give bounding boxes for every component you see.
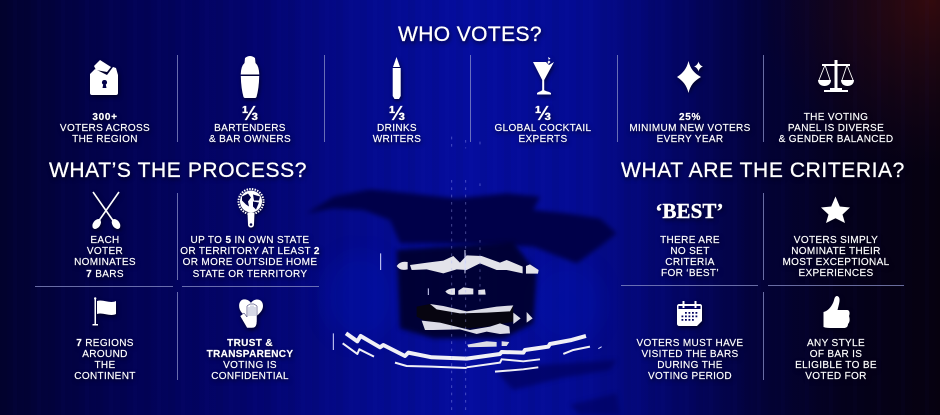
text: up to 5 in own state: OR TERRITORY AT LEAST 2 (180, 246, 320, 257)
text: any style of bar: OF BAR IS (810, 349, 862, 360)
text: voters across the region: 300+ (92, 112, 118, 123)
text: voters simply nominate: VOTERS SIMPLY (794, 235, 878, 246)
text: any style of bar: VOTED FOR (805, 371, 867, 382)
icon: calendar (677, 301, 702, 326)
text: minimum new voters: 25% (679, 112, 701, 123)
artwork: chin wave lines (346, 333, 586, 359)
text: up to 5 in own state: STATE OR TERRITORY (193, 269, 307, 280)
title: who votes: WHO VOTES? (398, 23, 542, 46)
text: trust and transparency: CONFIDENTIAL (211, 371, 289, 382)
text: no set criteria: CRITERIA (665, 257, 715, 268)
icon: scales of justice (818, 60, 854, 92)
text: must have visited: VOTERS MUST HAVE (637, 338, 743, 349)
text: bartenders and bar owners: & BAR OWNERS (209, 134, 291, 145)
icon: sparkle (677, 61, 703, 93)
text: any style of bar: ELIGIBLE TO BE (795, 360, 877, 371)
text: each voter nominates: NOMINATES (74, 257, 136, 268)
icon: martini glass (533, 57, 554, 94)
icon: cocktail shaker (241, 56, 259, 98)
icon: heart and hand (239, 299, 263, 328)
text: no set criteria: NO SET (670, 246, 710, 257)
text: voters across the region (60, 112, 150, 145)
dividers: process (35, 193, 319, 380)
text: bartenders and bar owners (209, 103, 291, 145)
text: bartenders and bar owners: ⅓ (242, 103, 258, 125)
text: minimum new voters: MINIMUM NEW VOTERS (629, 123, 751, 134)
icon: flag (92, 297, 116, 326)
text: voting panel diverse (779, 112, 893, 145)
text: up to 5 in own state (180, 235, 320, 280)
text: up to 5 in own state: OR MORE OUTSIDE HOME (183, 257, 317, 268)
text: each voter nominates: 7 BARS (86, 269, 124, 280)
icon: crossed bar spoons (91, 192, 122, 231)
icon: ballot box lock (90, 60, 118, 95)
text: voters simply nominate (782, 235, 890, 279)
text: up to 5 in own state: UP TO 5 IN OWN STATE (191, 235, 309, 246)
text: global cocktail experts: ⅓ (535, 103, 551, 125)
icon: best wordmark: ‘BEST’ (655, 199, 724, 223)
text: drinks writers: DRINKS (377, 123, 417, 134)
text: no set criteria: FOR ‘BEST’ (661, 268, 719, 279)
text: each voter nominates: EACH (90, 235, 120, 246)
text: drinks writers: WRITERS (373, 134, 421, 145)
text: must have visited: DURING THE (657, 360, 723, 371)
text: trust and transparency (207, 338, 293, 382)
dividers: criteria (621, 193, 904, 380)
text: voters simply nominate: NOMINATE THEIR (791, 246, 881, 257)
text: voters simply nominate: MOST EXCEPTIONAL (782, 257, 890, 268)
icon: star (821, 196, 850, 223)
text: must have visited: VOTING PERIOD (648, 371, 732, 382)
text: minimum new voters: EVERY YEAR (657, 134, 723, 145)
text: any style of bar (795, 338, 877, 382)
text: voters across the region: THE REGION (72, 134, 138, 145)
dividers: who votes (178, 55, 764, 142)
text: trust and transparency: TRUST & (227, 338, 273, 349)
text: any style of bar: ANY STYLE (807, 338, 865, 349)
heading: what are the criteria: WHAT ARE THE CRITERIA? (621, 159, 905, 182)
text: 7 regions: THE (94, 360, 116, 371)
text: bartenders and bar owners: BARTENDERS (214, 123, 286, 134)
text: trust and transparency: TRANSPARENCY (207, 349, 293, 360)
icon: globe strainer (238, 189, 264, 228)
icon: pencil (393, 57, 401, 99)
text: voting panel diverse: & GENDER BALANCED (779, 134, 893, 145)
heading: what's the process: WHAT’S THE PROCESS? (49, 159, 307, 182)
text: voting panel diverse: PANEL IS DIVERSE (788, 123, 884, 134)
artwork: dark mouth (417, 304, 513, 328)
abstract distorted face artwork (307, 137, 620, 415)
text: drinks writers: ⅓ (389, 103, 405, 125)
text: no set criteria (660, 235, 720, 279)
text: 7 regions (74, 338, 136, 382)
text: 7 regions: CONTINENT (74, 371, 136, 382)
text: 7 regions: 7 REGIONS (76, 338, 134, 349)
text: voters simply nominate: EXPERIENCES (799, 268, 873, 279)
icon: thumbs up (824, 296, 850, 328)
artwork: lower lip highlights (422, 304, 533, 347)
text: must have visited (637, 338, 743, 382)
text: 7 regions: AROUND (82, 349, 128, 360)
artwork: teeth dots (445, 287, 486, 295)
text: minimum new voters (629, 112, 751, 145)
artwork: vertical glitch marks (452, 137, 480, 410)
artwork: upper lip highlight (397, 255, 539, 274)
text: global cocktail experts: GLOBAL COCKTAIL (495, 123, 592, 134)
text: must have visited: VISITED THE BARS (641, 349, 739, 360)
text: each voter nominates: VOTER (87, 246, 123, 257)
text: trust and transparency: VOTING IS (223, 360, 277, 371)
text: global cocktail experts (495, 103, 592, 145)
text: each voter nominates (74, 235, 136, 280)
text: no set criteria: THERE ARE (660, 235, 720, 246)
text: drinks writers (373, 103, 421, 145)
text: voters across the region: VOTERS ACROSS (60, 123, 150, 134)
text: voting panel diverse: THE VOTING (804, 112, 868, 123)
text: global cocktail experts: EXPERTS (519, 134, 567, 145)
